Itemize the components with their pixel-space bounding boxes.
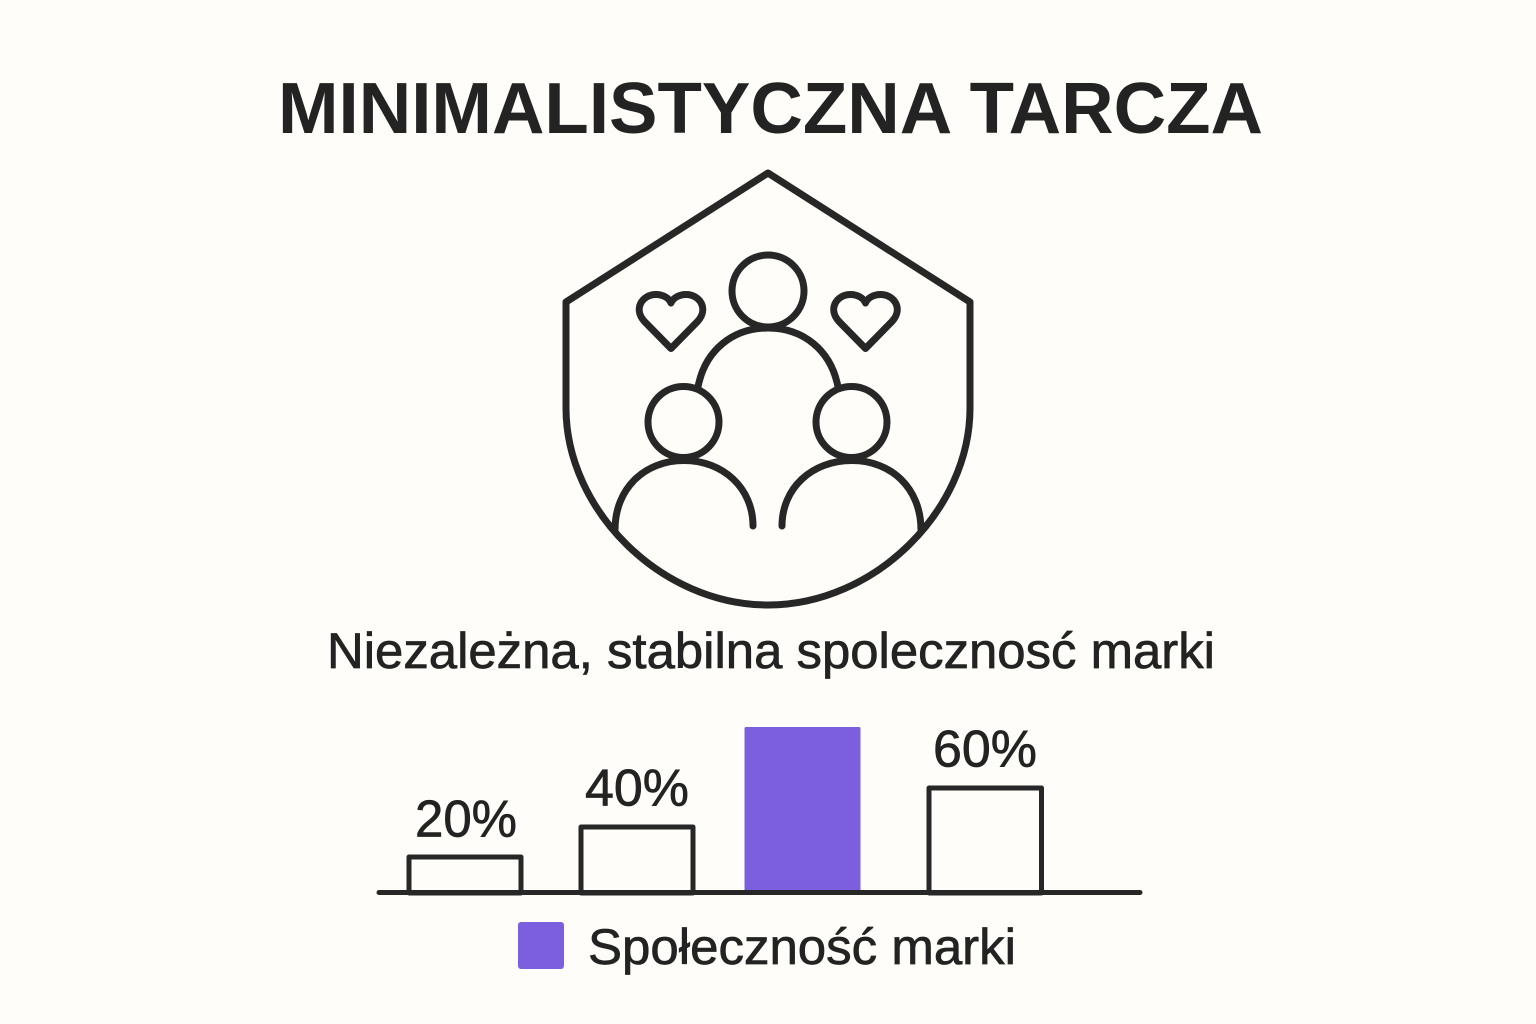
legend (518, 919, 1016, 975)
person: top (698, 255, 838, 387)
bar chart (379, 720, 1140, 893)
icon: shield with community (566, 173, 970, 605)
bar: 60% (929, 720, 1042, 893)
axis line (379, 890, 1140, 895)
legend swatch (518, 922, 564, 969)
bar: 40%: 40% (585, 760, 689, 818)
shield outline (566, 173, 970, 605)
icon: right heart (834, 294, 897, 348)
bar: highlighted brand community (744, 727, 860, 893)
legend label: Społeczność marki (588, 919, 1016, 975)
person: left (615, 386, 753, 530)
subtitle: Niezależna, stabilna spolecznosć marki (327, 623, 1215, 679)
bar: 60%: 60% (933, 720, 1037, 778)
icon: left heart (639, 294, 703, 348)
bar: 40% (581, 760, 693, 893)
bar: 20% (409, 790, 521, 893)
title: MINIMALISTYCZNA TARCZA (278, 69, 1263, 149)
person: right (782, 386, 921, 530)
bar: 20%: 20% (415, 790, 517, 848)
